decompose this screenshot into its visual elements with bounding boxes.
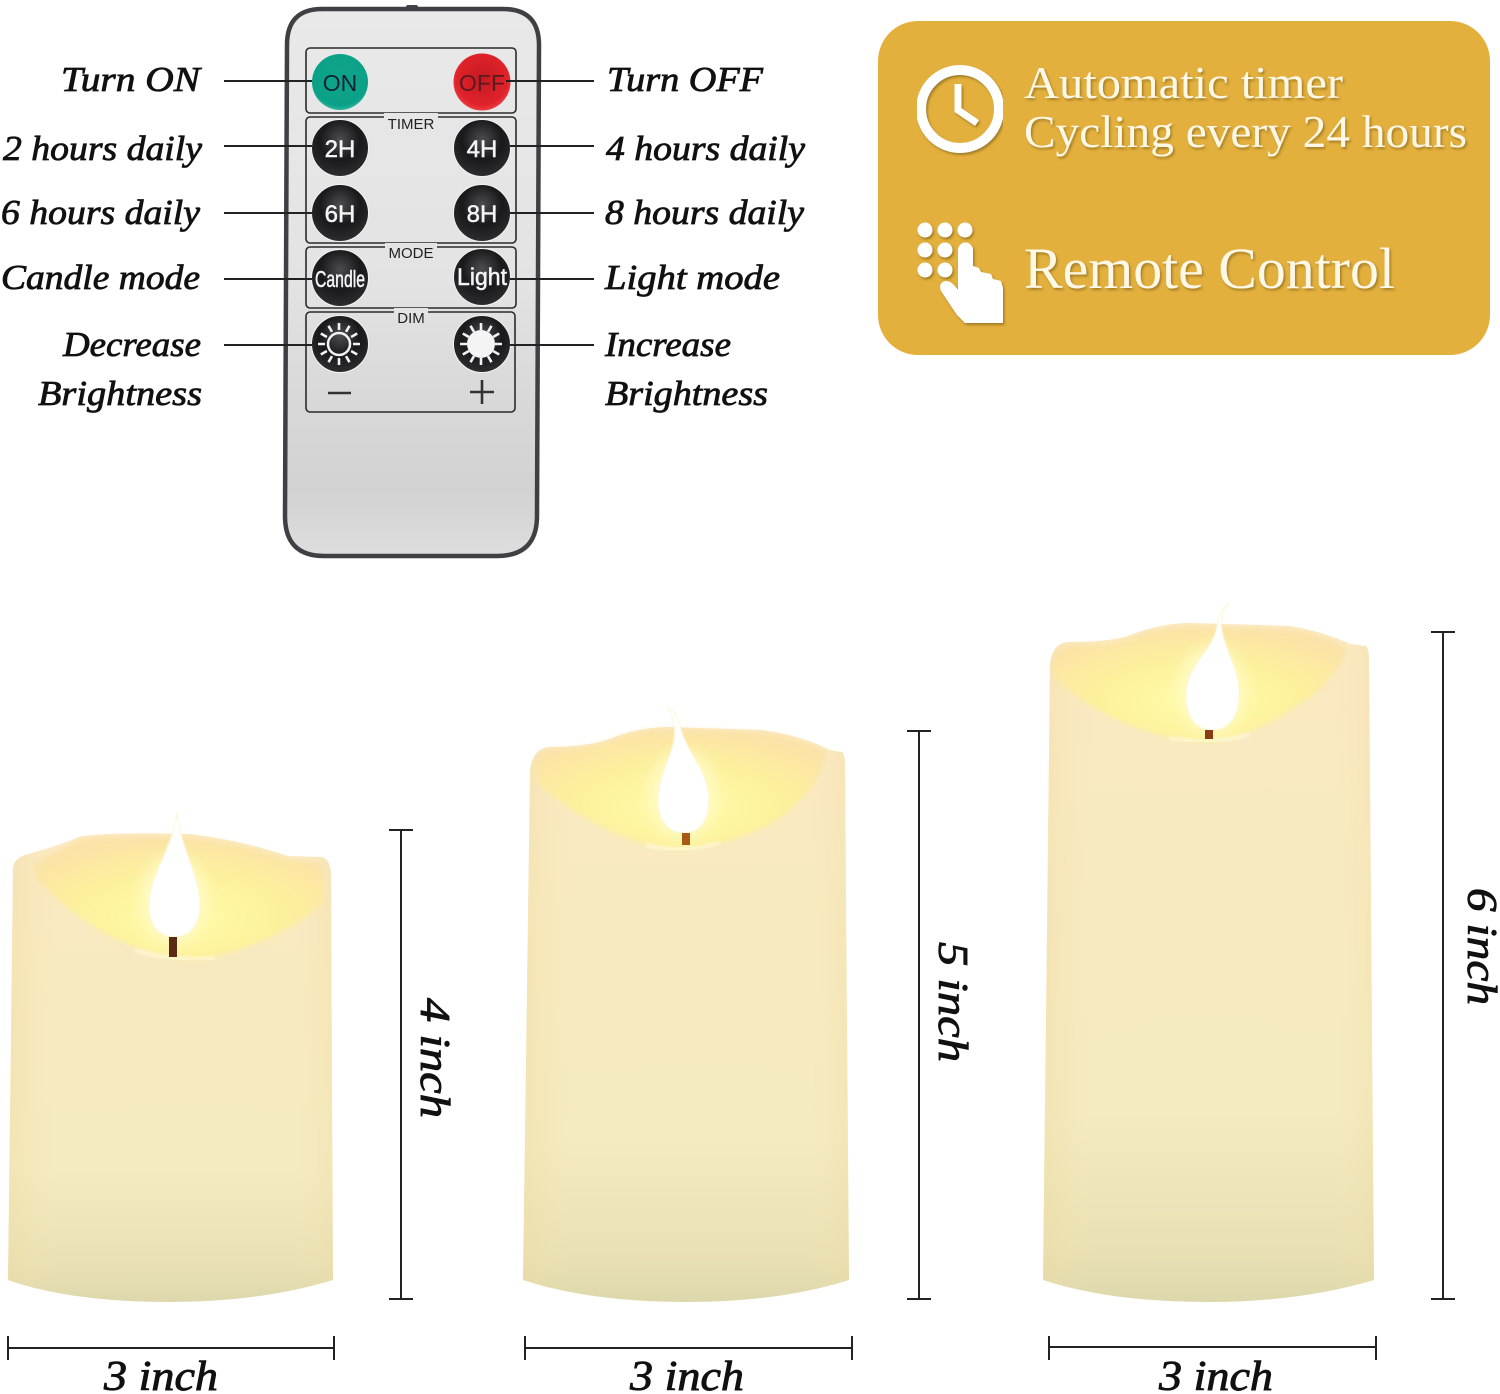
button: decrease brightness	[312, 316, 368, 372]
power section	[306, 48, 516, 113]
remote control	[285, 5, 539, 556]
plus sign	[470, 380, 494, 404]
candle: 4 inch	[8, 812, 333, 1302]
timer text	[1024, 57, 1467, 157]
dimension: height 5 inch: 5 inch	[929, 942, 975, 1062]
button: 2H	[312, 120, 368, 176]
icon: clock	[921, 70, 999, 148]
wick	[1205, 730, 1213, 739]
candle: 6 inch	[1043, 603, 1374, 1302]
button: 6H: 6H	[325, 201, 355, 228]
button: OFF: OFF	[459, 70, 505, 96]
dimension: height 5 inch	[907, 731, 975, 1299]
button: 4H	[454, 120, 510, 176]
dimension: width candle 1	[8, 1336, 334, 1394]
dimension: height 6 inch	[1431, 632, 1500, 1299]
candle: 5 inch	[523, 708, 849, 1302]
timer text: Automatic timer	[1024, 57, 1343, 108]
top notch	[406, 5, 418, 9]
wick	[682, 833, 690, 845]
left button labels	[1, 60, 202, 413]
melt pool	[32, 836, 324, 960]
label: 8 hours daily: 8 hours daily	[605, 193, 804, 232]
button: Light	[454, 248, 510, 306]
button: OFF	[454, 54, 510, 110]
timer section	[306, 113, 516, 243]
icon: touch keypad	[918, 222, 1003, 323]
label: 2 hours daily: 2 hours daily	[3, 129, 202, 168]
button: Candle	[312, 250, 368, 306]
flame	[1178, 603, 1246, 734]
candle body	[8, 833, 333, 1302]
label: Increase Brightness	[604, 325, 768, 413]
label: Light mode: Light mode	[604, 258, 780, 297]
label: Turn ON: Turn ON	[61, 60, 202, 99]
button: ON	[312, 54, 368, 110]
remote body	[285, 9, 539, 556]
candle body	[523, 727, 849, 1302]
label: Decrease Brightness: Brightness	[38, 374, 202, 413]
button: Candle: Candle	[315, 266, 365, 292]
label: Increase Brightness: Brightness	[605, 374, 768, 413]
dimension: height 4 inch: 4 inch	[411, 998, 457, 1118]
button: 4H: 4H	[467, 136, 497, 163]
button: increase brightness	[454, 316, 510, 372]
flame	[140, 812, 208, 944]
label: Turn OFF: Turn OFF	[607, 60, 764, 99]
panel background	[878, 21, 1490, 355]
panel: features	[878, 21, 1490, 355]
label: Decrease Brightness: Decrease	[62, 325, 201, 364]
mode section	[306, 243, 516, 308]
timer text: Cycling every 24 hours	[1024, 106, 1467, 157]
right leader lines	[506, 81, 594, 345]
button: ON: ON	[323, 70, 357, 96]
button: Light: Light	[457, 264, 507, 291]
melt pool	[535, 729, 826, 849]
dim section	[306, 308, 515, 412]
wick	[169, 937, 177, 957]
pool lip highlight	[135, 950, 215, 959]
dimension: height 4 inch	[389, 830, 457, 1299]
button: 8H	[454, 184, 510, 242]
minus sign	[328, 392, 351, 394]
button: 6H	[312, 184, 368, 242]
button: 8H: 8H	[467, 201, 497, 228]
dimension: width candle 3	[1049, 1336, 1376, 1394]
pool lip highlight	[645, 842, 720, 849]
dim section: DIM	[397, 310, 425, 327]
label: Increase Brightness: Increase	[604, 325, 731, 364]
timer section: TIMER	[388, 116, 434, 133]
label: 6 hours daily: 6 hours daily	[1, 193, 200, 232]
label: 4 hours daily: 4 hours daily	[606, 129, 805, 168]
label: Candle mode: Candle mode	[1, 258, 200, 297]
pool lip highlight	[1170, 734, 1250, 741]
candle body	[1043, 623, 1374, 1302]
melt pool	[1052, 626, 1346, 742]
label: Decrease Brightness	[38, 325, 202, 413]
button: 2H: 2H	[325, 136, 355, 163]
flame	[649, 708, 717, 839]
right button labels	[604, 60, 805, 413]
remote control text: Remote Control	[1024, 236, 1395, 301]
left leader lines	[224, 81, 312, 345]
dimension: width candle 2	[525, 1336, 852, 1394]
mode section: MODE	[388, 245, 434, 262]
